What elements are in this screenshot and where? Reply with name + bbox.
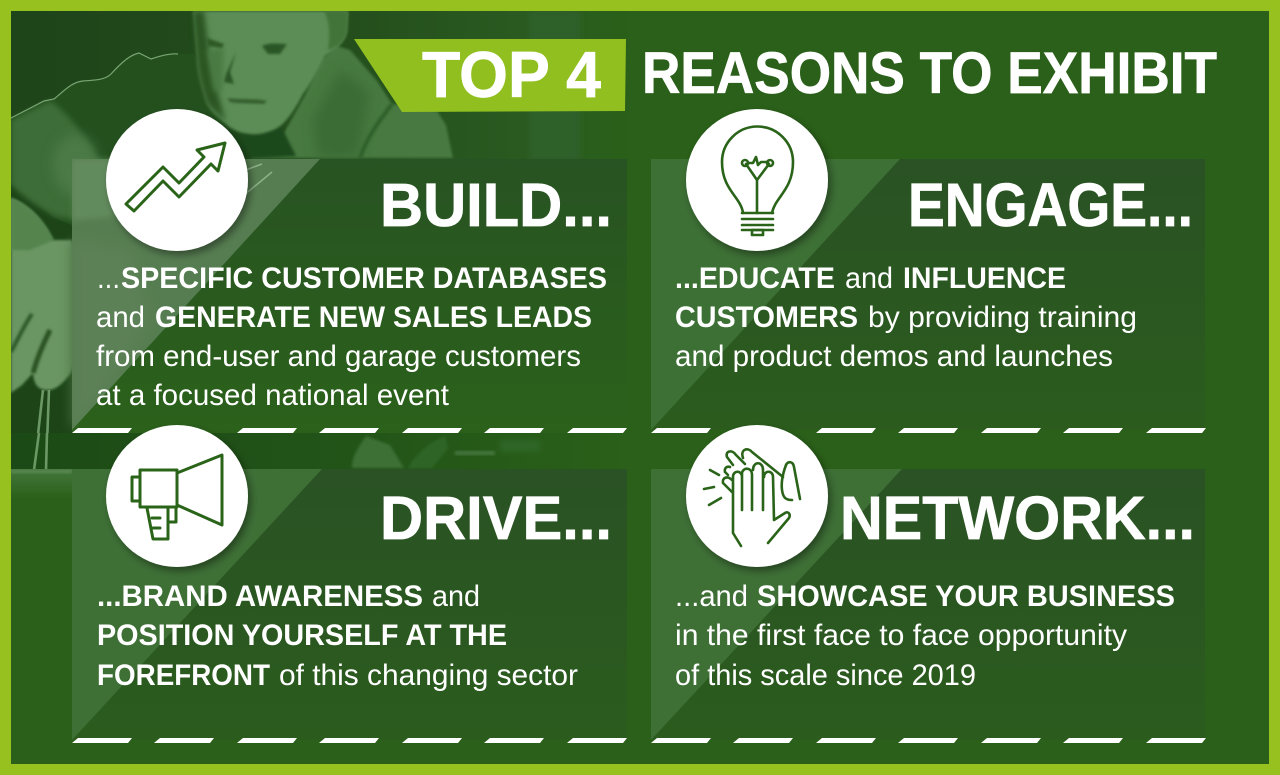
text block: build: GENERATE NEW SALES LEADS xyxy=(155,301,592,334)
text block: build: and xyxy=(96,301,145,334)
lower band xyxy=(11,433,446,469)
tool shaft xyxy=(36,390,50,433)
text block: network: ...and xyxy=(675,580,748,613)
heading: build: BUILD... xyxy=(380,171,612,239)
eye shadows xyxy=(207,38,224,48)
dashed divider: lower row xyxy=(72,738,1206,743)
text block: drive: of this changing sector xyxy=(279,659,578,692)
text block: engage: CUSTOMERS xyxy=(675,301,858,334)
text block: engage: INFLUENCE xyxy=(903,262,1066,295)
text block: engage: and product demos and launches xyxy=(675,340,1113,373)
panel highlight: drive xyxy=(72,469,322,740)
text block: network xyxy=(675,580,1175,692)
icon: clapping hands xyxy=(686,425,828,567)
text block: drive: ...BRAND AWARENESS xyxy=(97,580,423,613)
face xyxy=(193,11,348,134)
text block: network: SHOWCASE YOUR BUSINESS xyxy=(757,580,1175,613)
neck shadow xyxy=(230,130,296,158)
text block: build: at a focused national event xyxy=(96,379,450,412)
panel: build xyxy=(72,159,627,430)
jacket right xyxy=(250,46,453,158)
text block: build: SPECIFIC CUSTOMER DATABASES xyxy=(121,262,607,295)
text block: network: of this scale since 2019 xyxy=(675,659,976,692)
torso seen through panel xyxy=(72,159,320,430)
icon: megaphone xyxy=(106,425,248,567)
panel: drive xyxy=(72,469,627,740)
text block: drive: POSITION YOURSELF AT THE xyxy=(97,619,507,652)
left cheek shade xyxy=(207,48,224,92)
heading: network: NETWORK... xyxy=(840,484,1195,552)
title: top 4: TOP 4 xyxy=(422,38,601,111)
hair and ear xyxy=(324,11,348,50)
heading: drive: DRIVE... xyxy=(380,484,612,552)
jacket back xyxy=(11,54,150,225)
text block: build: ... xyxy=(97,262,120,295)
text block: build: from end-user and garage customers xyxy=(96,340,581,373)
icon: light bulb xyxy=(686,109,828,251)
dashed divider: upper row xyxy=(72,428,1206,433)
background photo: mechanic xyxy=(11,11,582,492)
text block: engage: and xyxy=(845,262,893,295)
heading: engage: ENGAGE... xyxy=(908,171,1193,239)
redraw tool over band xyxy=(34,433,47,470)
nose shadow xyxy=(224,52,236,84)
text block: engage: by providing training xyxy=(868,301,1137,334)
text block: drive xyxy=(97,580,578,692)
panel: network xyxy=(651,469,1205,740)
icon: growth arrow xyxy=(106,109,248,251)
mouth xyxy=(227,98,267,104)
panel: engage xyxy=(651,159,1205,430)
title: reasons to exhibit: REASONS TO EXHIBIT xyxy=(642,41,1217,106)
text block: engage xyxy=(675,262,1137,373)
text block: build xyxy=(96,262,607,412)
panel highlight: engage xyxy=(651,159,900,430)
text block: drive: and xyxy=(432,580,480,613)
glove cuff and hand xyxy=(11,198,79,393)
sleeve xyxy=(11,100,86,220)
text block: network: in the first face to face opportunity xyxy=(675,619,1127,652)
text block: engage: ...EDUCATE xyxy=(675,262,835,295)
panel highlight: network xyxy=(651,469,902,740)
panel highlight: build xyxy=(72,159,320,430)
text block: drive: FOREFRONT xyxy=(97,659,270,692)
title banner xyxy=(354,38,626,112)
